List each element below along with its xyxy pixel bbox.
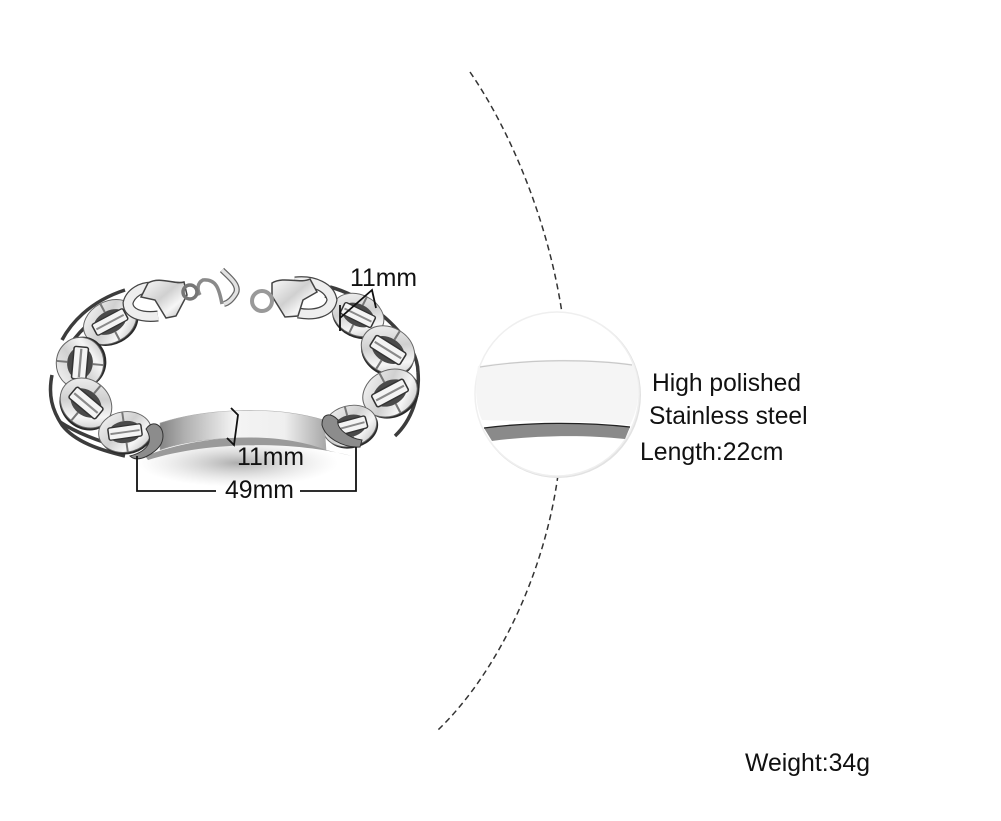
bracelet: right links [319,285,428,455]
label: 49mm: 49mm [225,477,294,504]
text: stainless steel: Stainless steel [649,403,808,430]
dashed arc: upper [470,72,562,313]
top edge highlight [480,361,632,367]
circle lens [475,312,639,476]
text: weight: Weight:34g [745,750,870,777]
label: 11mm height: 11mm [237,444,304,471]
bracelet: table shadow [138,439,338,487]
polished face [476,360,638,425]
dashed arc: lower [438,475,558,730]
bracelet: plate lower edge [145,438,352,460]
bracelet: polished ID plate [160,410,326,450]
bracelet: left links [49,290,155,458]
magnified detail circle [475,312,641,478]
circle shadow [475,312,641,478]
dark bevel strip [484,423,630,441]
bracelet: star end links [128,279,332,318]
bracelet: side rails [50,287,418,456]
bracelet: right plate end cap [322,415,362,447]
bracelet: lobster clasp [183,270,272,311]
bracelet photo [49,270,428,487]
text: high polished: High polished [652,370,801,397]
dimension: clasp-end width [340,265,417,331]
label: 11mm width: 11mm [350,265,417,292]
bracelet: left plate end cap [130,424,163,459]
bevel top line [484,423,630,428]
dimension: plate length [137,447,356,504]
text: length: Length:22cm [640,439,783,466]
dimension: plate height [227,408,304,471]
